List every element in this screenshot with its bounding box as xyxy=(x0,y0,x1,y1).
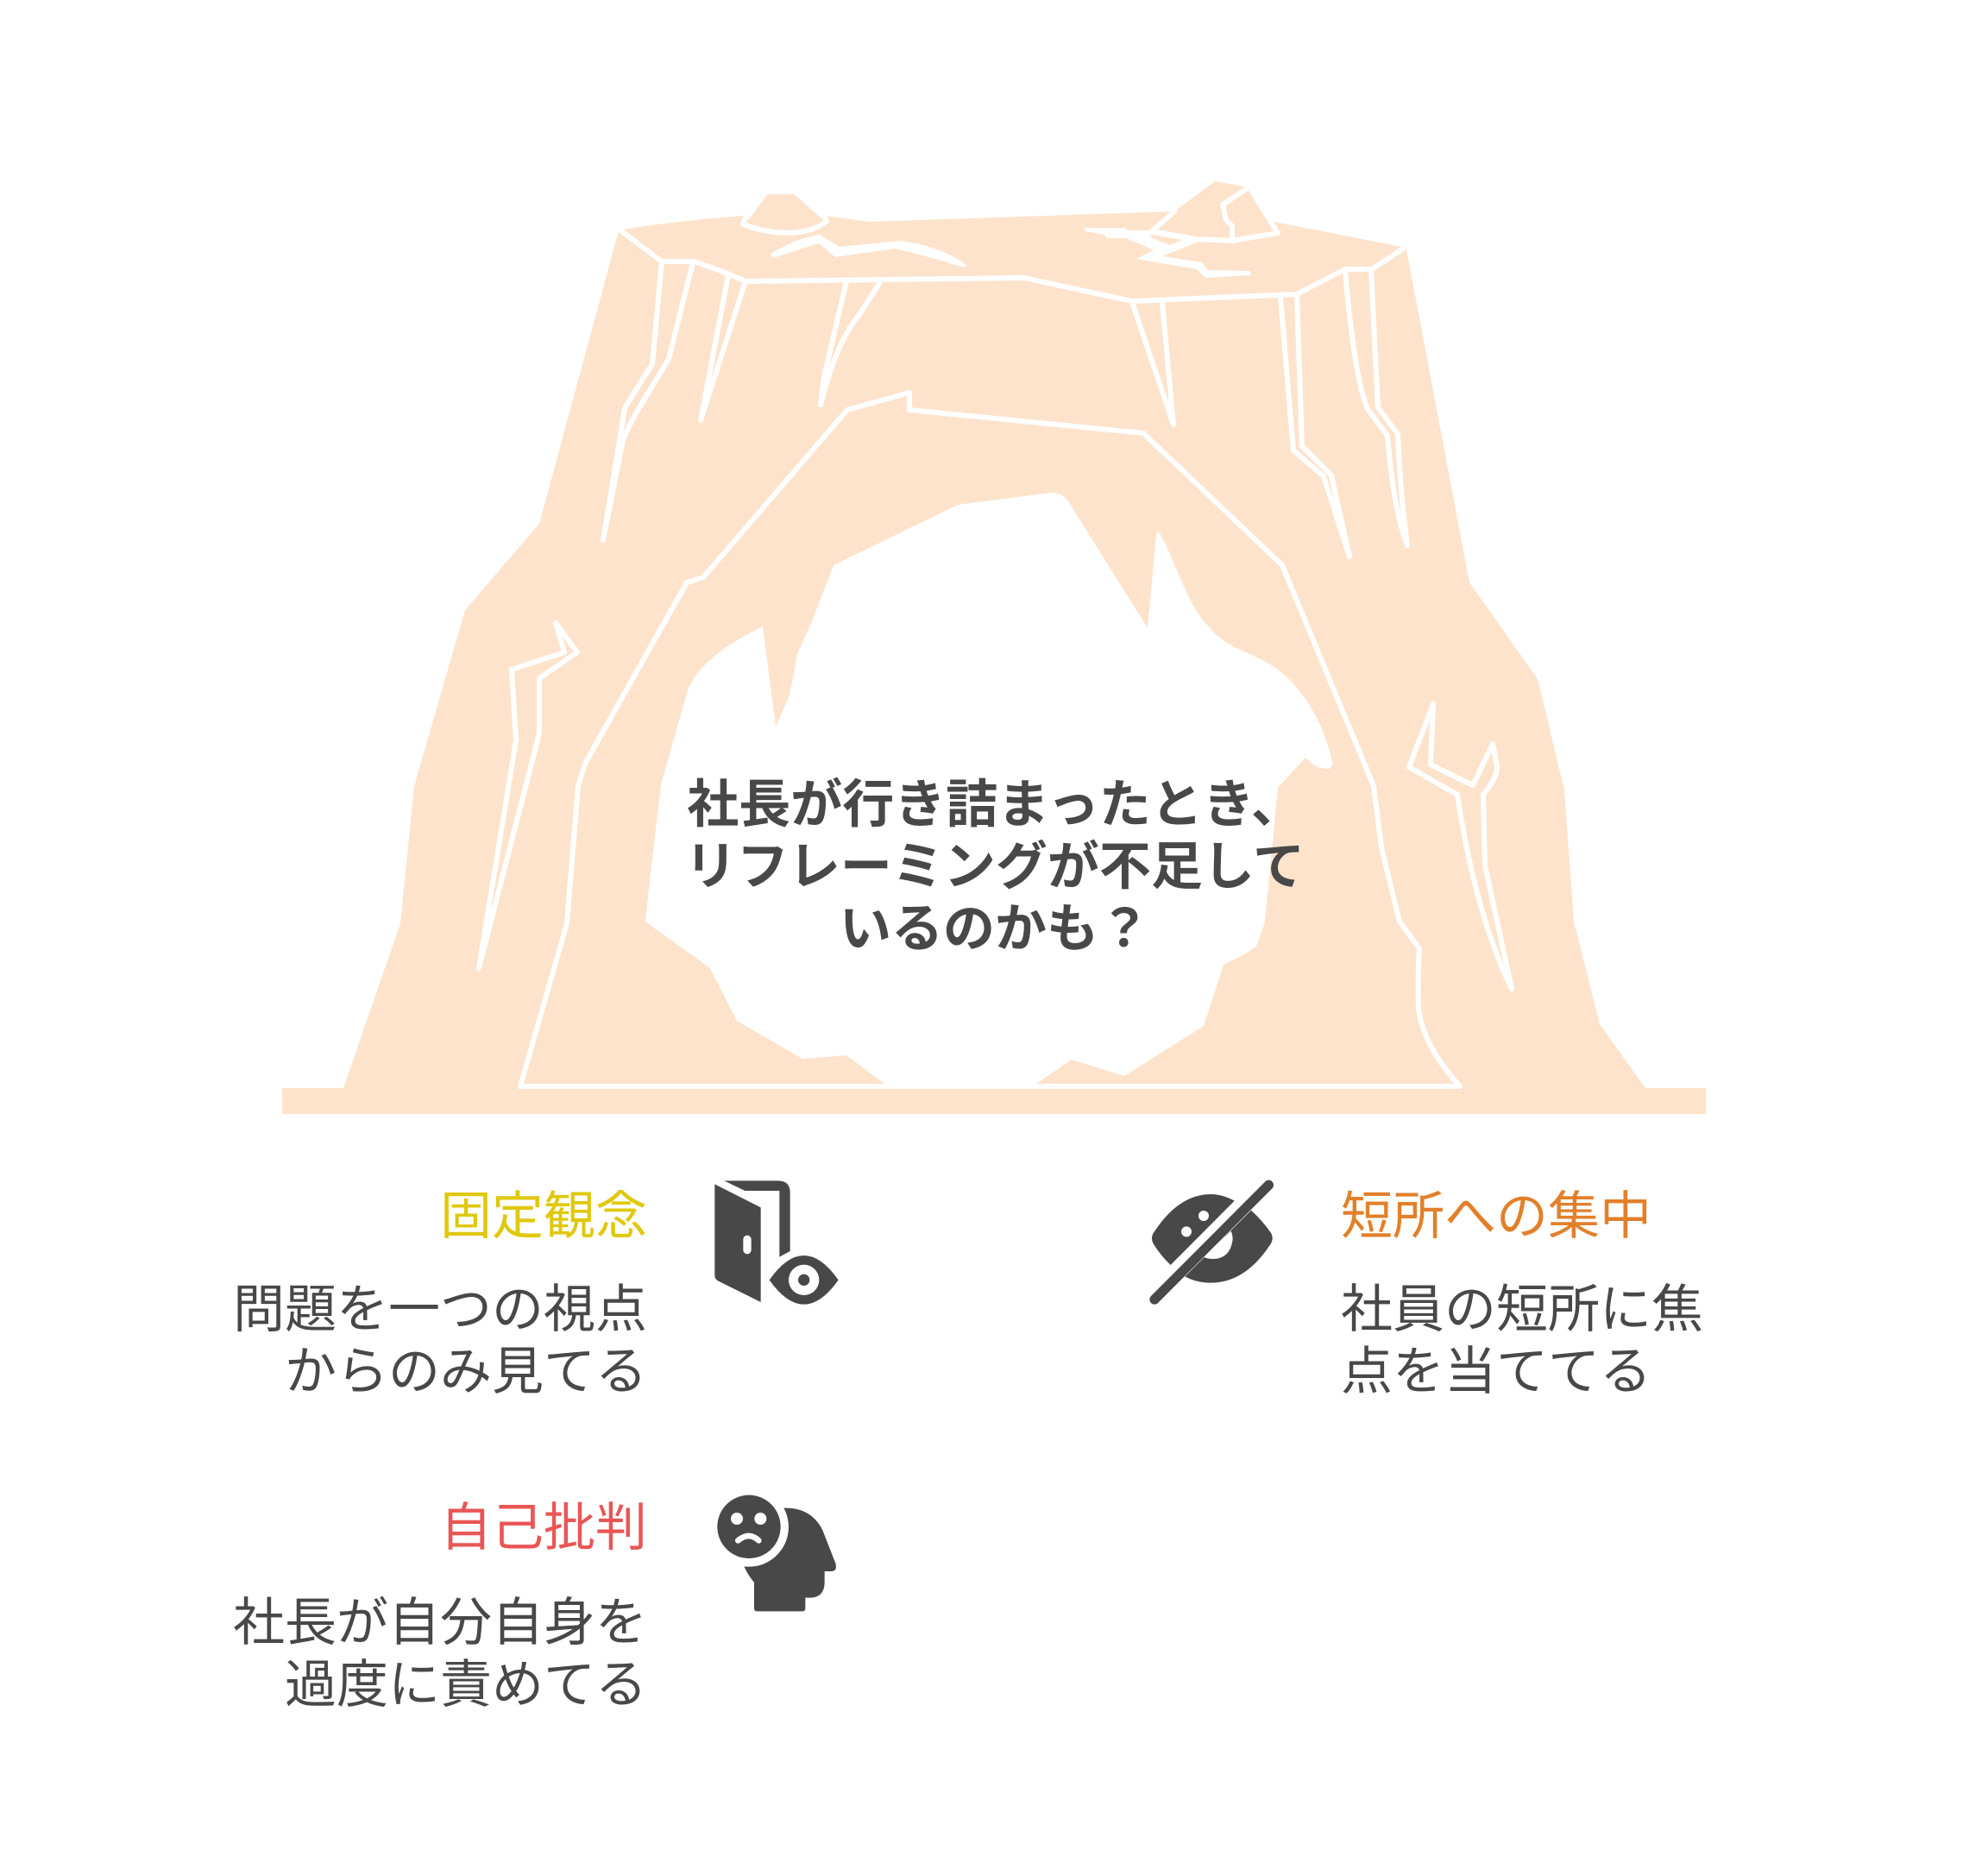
title: リフレーミングが不足して xyxy=(685,838,1305,896)
description: self-criticism: 過度に責めてる xyxy=(285,1656,647,1714)
cracks in rock xyxy=(479,261,1512,989)
title: 社長が行き詰まったとき、 xyxy=(687,776,1303,834)
title xyxy=(685,776,1305,958)
icon: door with eye xyxy=(714,1180,839,1305)
arch opening xyxy=(645,493,1332,1086)
small gap in right fissure xyxy=(1150,235,1183,245)
top right fissure xyxy=(1084,228,1250,278)
illustration: rock arch xyxy=(282,181,1706,1114)
plateau edge line xyxy=(620,230,1405,301)
right rock peak outline xyxy=(1152,188,1278,241)
item: focus on weaknesses xyxy=(1341,1187,1703,1400)
heading: focus on weaknesses: 短所への集中 xyxy=(1341,1187,1651,1245)
description: focus on weaknesses: 点を当ててる xyxy=(1341,1343,1651,1400)
title: いるのかも？ xyxy=(840,900,1150,958)
heading: self-criticism: 自己批判 xyxy=(440,1499,647,1557)
icon: head with sad face xyxy=(717,1495,836,1612)
description: focus on weaknesses xyxy=(1341,1281,1703,1400)
arch outline xyxy=(520,393,1460,1086)
description: focus on weaknesses: 社員の短所に焦 xyxy=(1341,1281,1703,1338)
item: self-criticism xyxy=(233,1499,647,1714)
rock silhouette with ground xyxy=(282,181,1706,1114)
item: fixed ideas xyxy=(233,1187,647,1400)
description: fixed ideas: からのみ見てる xyxy=(285,1343,647,1400)
left rock peak outline xyxy=(743,216,827,233)
description: fixed ideas xyxy=(233,1281,647,1400)
description: self-criticism: 社長が自分自身を xyxy=(233,1594,647,1652)
heading: fixed ideas: 固定観念 xyxy=(440,1187,647,1245)
icon: crossed-out eye xyxy=(1149,1180,1274,1305)
top left fissure xyxy=(771,235,966,267)
description: fixed ideas: 問題を一つの視点 xyxy=(233,1281,647,1338)
description: self-criticism xyxy=(233,1594,647,1714)
